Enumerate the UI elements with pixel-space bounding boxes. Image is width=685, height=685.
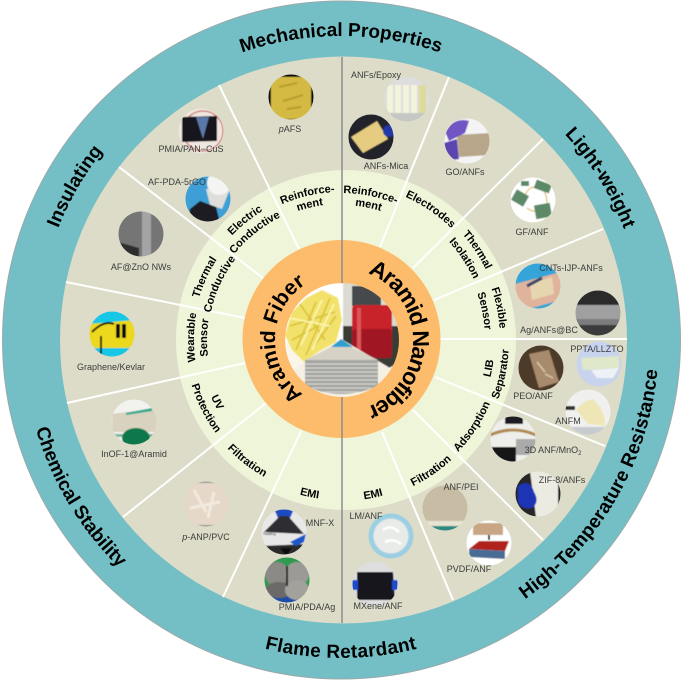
photo: ANF/PEI xyxy=(422,485,468,531)
central vertical divider xyxy=(341,57,343,623)
photo: LM/ANF xyxy=(368,513,414,559)
heading: Flame Retardant: Flame Retardant xyxy=(266,636,417,658)
category: Reinforcement, fiber side: ment xyxy=(296,198,324,211)
photo: InOF-1@Aramid xyxy=(112,400,156,444)
light green category ring xyxy=(176,170,516,510)
label: ANFs-Mica: ANFs-Mica xyxy=(364,161,408,171)
photo: ANFs/Epoxy xyxy=(384,76,430,122)
photo: pAFS xyxy=(268,74,314,120)
category: Wearable Sensor xyxy=(186,313,208,363)
photo: AF@ZnO NWs xyxy=(118,211,164,258)
category: LIB Separator: Separator xyxy=(492,349,508,399)
category: Thermal Conductive xyxy=(192,256,235,312)
photo: red nanofiber solution bottle xyxy=(343,283,400,368)
category: UV Protection: Protection xyxy=(192,383,220,432)
label: GF/ANF: GF/ANF xyxy=(516,227,549,237)
label: LM/ANF: LM/ANF xyxy=(349,511,383,521)
category: Thermal Isolation xyxy=(449,229,493,278)
photo: ANFM xyxy=(565,389,611,435)
photo: ZIF-8/ANFs xyxy=(515,471,561,517)
category: LIB Separator: LIB xyxy=(483,360,494,377)
photo: AF-PDA-5rGO xyxy=(186,176,230,222)
category: Wearable Sensor: Wearable xyxy=(186,313,196,363)
label: 3D ANF/MnO2: 3D ANF/MnO xyxy=(525,445,578,455)
label: PPTA/LLZTO: PPTA/LLZTO xyxy=(570,344,624,354)
photo: 3D ANF/MnO2 xyxy=(490,416,536,463)
category: Reinforcement, fiber side: Reinforce- xyxy=(280,186,334,204)
label: InOF-1@Aramid: InOF-1@Aramid xyxy=(101,449,167,459)
label: CNTs-IJP-ANFs: CNTs-IJP-ANFs xyxy=(539,263,603,273)
title: Aramid Nanofiber: Aramid Nanofiber xyxy=(368,262,429,418)
category: Flexible Sensor: Flexible xyxy=(492,286,507,328)
label: PMIA/PAN-CuS: PMIA/PAN−CuS xyxy=(158,144,224,154)
category: Reinforcement, nanofiber side: Reinforce- xyxy=(344,186,398,202)
photo: PVDF/ANF xyxy=(466,520,512,566)
label: PEO/ANF: PEO/ANF xyxy=(513,391,553,401)
label: Graphene/Kevlar: Graphene/Kevlar xyxy=(77,362,145,372)
category: Flexible Sensor: Sensor xyxy=(478,292,490,330)
label: pAFS: pAFS xyxy=(278,124,301,134)
label: PMIA/PDA/Ag: PMIA/PDA/Ag xyxy=(279,602,335,612)
central photo montage xyxy=(285,283,400,400)
category: Filtration, fiber side: Filtration xyxy=(228,444,266,477)
photo: yellow aramid fibers xyxy=(285,283,343,362)
photo: CNTs-IJP-ANFs xyxy=(515,263,561,309)
label: ANFM: ANFM xyxy=(555,416,581,426)
category: Thermal Isolation: Thermal xyxy=(464,229,493,269)
photo: MNF-X: Twisting xyxy=(263,532,276,536)
photo: GF/ANF xyxy=(510,177,556,223)
label: MNF-X: MNF-X xyxy=(306,518,334,528)
photo: PPTA/LLZTO xyxy=(576,341,622,387)
category: Thermal Conductive: Conductive xyxy=(204,256,235,312)
category: Electric Conductive: Conductive xyxy=(230,212,280,252)
category: UV Protection: UV xyxy=(212,394,224,408)
category: Reinforcement, nanofiber side: ment xyxy=(356,200,382,211)
label: 3D ANF/MnO2: 2 xyxy=(578,451,582,457)
label: PVDF/ANF: PVDF/ANF xyxy=(447,564,492,574)
heading: Mechanical Properties: Mechanical Properties xyxy=(239,22,442,52)
label: ANFs/Epoxy: ANFs/Epoxy xyxy=(351,70,402,80)
heading: Insulating: Insulating xyxy=(46,146,104,228)
label: ANF/PEI: ANF/PEI xyxy=(443,482,479,492)
label: p-ANP/PVC: p-ANP/PVC xyxy=(181,532,230,542)
photo: PMIA/PAN-CuS xyxy=(178,108,224,154)
photo: Graphene/Kevlar xyxy=(89,311,135,357)
photo: MXene/ANF xyxy=(352,561,398,607)
category: Thermal Conductive: Thermal xyxy=(192,256,216,296)
category: Electric Conductive: Electric xyxy=(227,206,262,235)
label: Ag/ANFs@BC: Ag/ANFs@BC xyxy=(520,325,578,335)
photo: GO/ANFs xyxy=(444,118,490,164)
sector dividers xyxy=(66,77,627,600)
category: EMI, nanofiber side: EMI xyxy=(364,488,382,500)
category: Electrodes: Electrodes xyxy=(406,190,454,228)
category: Filtration, nanofiber side: Filtration xyxy=(410,456,452,486)
category: LIB Separator xyxy=(483,349,508,399)
beige application disc xyxy=(60,56,627,624)
category: Thermal Isolation: Isolation xyxy=(449,237,478,278)
photo: p-ANP/PVC xyxy=(183,481,229,527)
category: EMI, fiber side: EMI xyxy=(300,488,319,498)
title: Aramid Fiber: Aramid Fiber xyxy=(260,275,303,402)
heading: Light-weight: Light-weight xyxy=(566,126,635,229)
label: GO/ANFs: GO/ANFs xyxy=(445,167,485,177)
label: ZIF-8/ANFs: ZIF-8/ANFs xyxy=(539,475,586,485)
category: Flexible Sensor xyxy=(478,286,507,330)
label: MXene/ANF: MXene/ANF xyxy=(353,601,403,611)
photo: MNF-X xyxy=(261,509,307,556)
photo: PMIA/PDA/Ag xyxy=(264,557,310,604)
orange core ring xyxy=(242,240,440,438)
category: Wearable Sensor: Sensor xyxy=(200,318,208,356)
photo: grey fiber spool xyxy=(304,338,390,397)
photo: ANFs-Mica xyxy=(348,114,395,160)
heading: Chemical Stability: Chemical Stability xyxy=(37,427,126,566)
label: AF@ZnO NWs: AF@ZnO NWs xyxy=(111,262,172,272)
label: AF-PDA-5rGO: AF-PDA-5rGO xyxy=(148,177,206,187)
category: Adsorption: Adsorption xyxy=(454,402,490,452)
photo: Ag/ANFs@BC xyxy=(575,290,621,337)
photo: PEO/ANF xyxy=(518,345,564,391)
heading: High-Temperature Resistance: High-Temperature Resistance xyxy=(518,370,658,599)
